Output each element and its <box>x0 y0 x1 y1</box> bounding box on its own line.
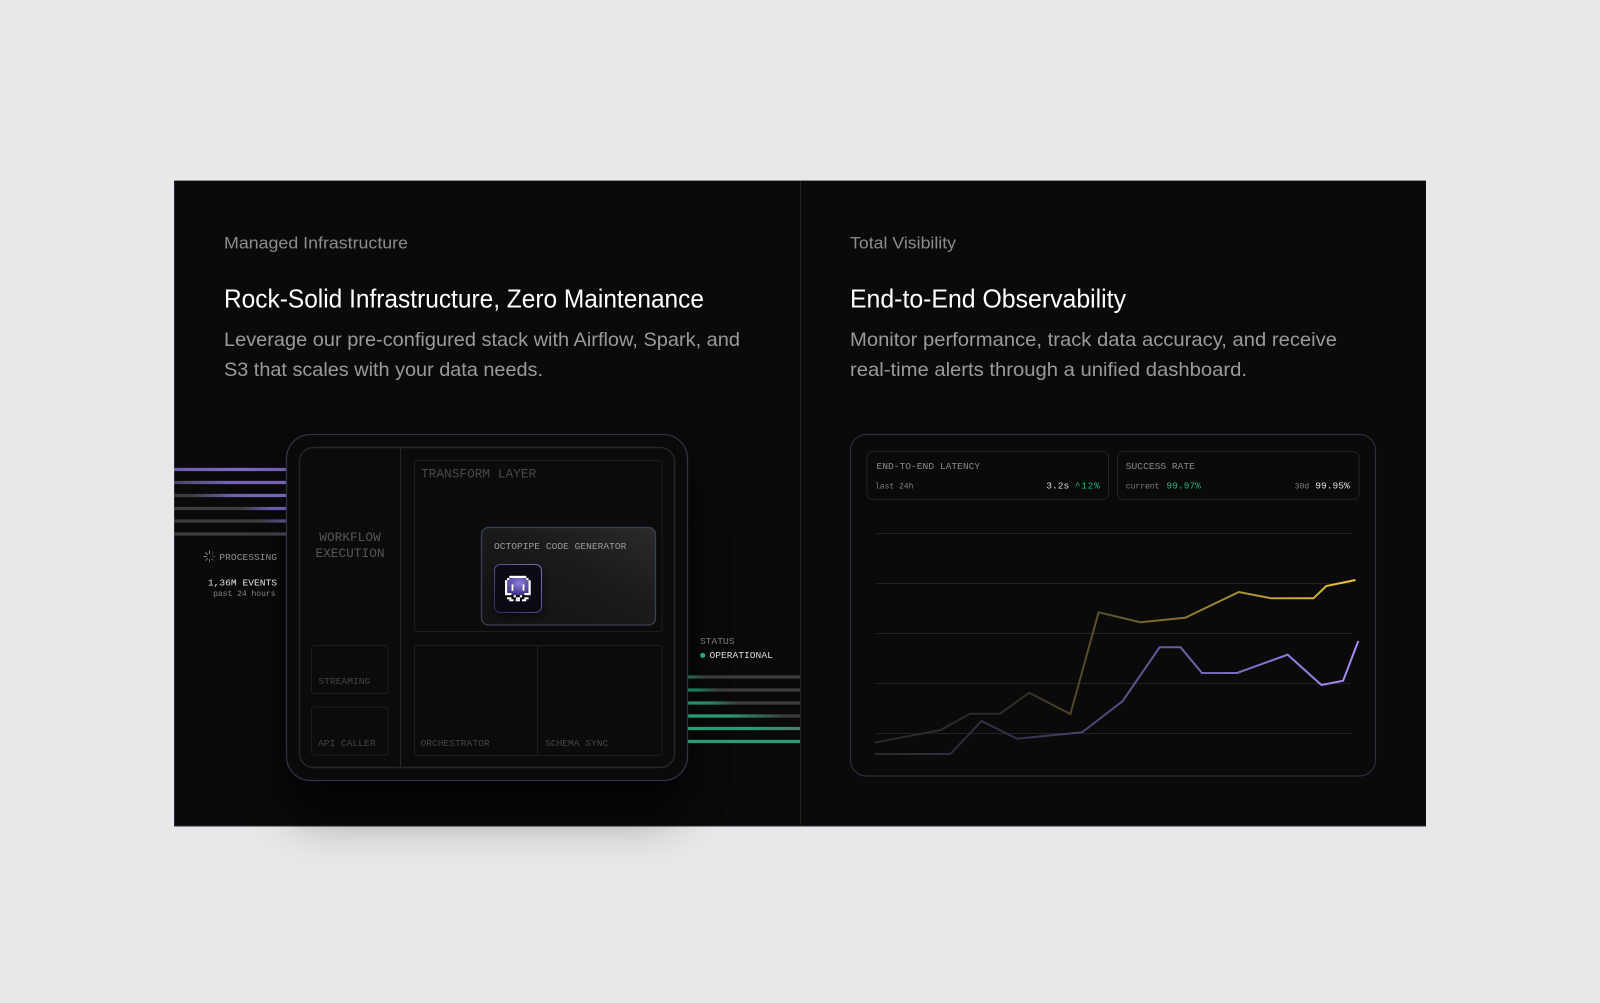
icon: pixel octopus <box>494 564 542 617</box>
stat card: success rate: current <box>1126 482 1159 492</box>
stat card: success rate: 99.95% <box>1315 481 1350 492</box>
description: left panel <box>224 330 740 381</box>
heading: end-to-end observability: End-to-End Observability <box>850 286 1126 314</box>
label: workflow execution: EXECUTION <box>315 546 385 561</box>
series: purple <box>874 641 1358 754</box>
device drop shadow: inner darkening <box>296 470 688 805</box>
stat card: end-to-end latency: 3.2s <box>1046 481 1069 492</box>
outer frame <box>286 434 688 780</box>
box: transform layer <box>414 460 662 632</box>
module: streaming <box>312 646 388 694</box>
panel divider <box>800 181 802 826</box>
box: transform layer: TRANSFORM LAYER <box>421 467 537 482</box>
stat card: end-to-end latency: END-TO-END LATENCY <box>876 461 980 472</box>
description: right panel <box>850 330 1337 381</box>
device frame <box>286 434 688 780</box>
processing status <box>204 551 277 599</box>
caption: past 24 hours: past 24 hours <box>213 590 276 599</box>
module: api caller: API CALLER <box>318 738 376 749</box>
stat card: success rate: SUCCESS RATE <box>1126 461 1195 472</box>
indicator dot <box>700 653 705 658</box>
module: streaming: STREAMING <box>318 676 371 687</box>
description: right panel: Monitor performance, track data accuracy, and receive <box>850 330 1337 351</box>
series: yellow <box>874 580 1356 743</box>
label: workflow execution: WORKFLOW <box>319 530 381 545</box>
panel edge lines <box>174 181 1426 826</box>
line chart <box>874 534 1358 754</box>
box: orchestrator and schema sync: ORCHESTRATOR <box>420 738 490 749</box>
infographic <box>174 180 1426 848</box>
eyebrow: total visibility: Total Visibility <box>850 234 957 252</box>
stat card: success rate <box>1118 452 1359 500</box>
stat card: success rate: 30d <box>1295 482 1309 492</box>
heading: rock-solid infrastructure: Rock-Solid Infrastructure, Zero Maintenance <box>224 286 704 314</box>
label: workflow execution <box>315 530 385 561</box>
right heading group: total visibility <box>850 234 1337 381</box>
left heading group: managed infrastructure <box>224 234 740 381</box>
inner frame <box>300 448 674 768</box>
dashboard card <box>850 434 1376 776</box>
card: octopipe code generator: OCTOPIPE CODE GENERATOR <box>494 541 627 552</box>
device drop shadow: soft outer <box>290 500 680 815</box>
dark container panel <box>174 181 1426 827</box>
card: octopipe code generator <box>482 528 656 625</box>
module: api caller <box>312 707 388 755</box>
status: operational <box>700 636 773 661</box>
stat card: end-to-end latency <box>867 452 1108 500</box>
description: left panel: S3 that scales with your data needs. <box>224 360 543 381</box>
stat card: end-to-end latency: last 24h <box>875 482 914 492</box>
status: operational: STATUS <box>700 636 735 647</box>
description: left panel: Leverage our pre-configured stack with Airflow, Spark, and <box>224 330 740 351</box>
label: processing: PROCESSING <box>219 552 277 563</box>
icon: spinner <box>204 551 215 562</box>
eyebrow: managed infrastructure: Managed Infrastructure <box>224 234 408 252</box>
box: orchestrator and schema sync: SCHEMA SYNC <box>545 738 609 749</box>
status: operational: OPERATIONAL <box>710 650 773 661</box>
box: orchestrator and schema sync <box>414 646 662 756</box>
description: right panel: real-time alerts through a unified dashboard. <box>850 360 1247 381</box>
output pipelines: green lines <box>688 677 800 742</box>
stat card: success rate: 99.97% <box>1166 481 1201 492</box>
stat card: end-to-end latency: ^12% <box>1075 481 1100 492</box>
metric: events: 1,36M EVENTS <box>208 577 277 588</box>
input pipelines: purple lines <box>174 470 286 534</box>
